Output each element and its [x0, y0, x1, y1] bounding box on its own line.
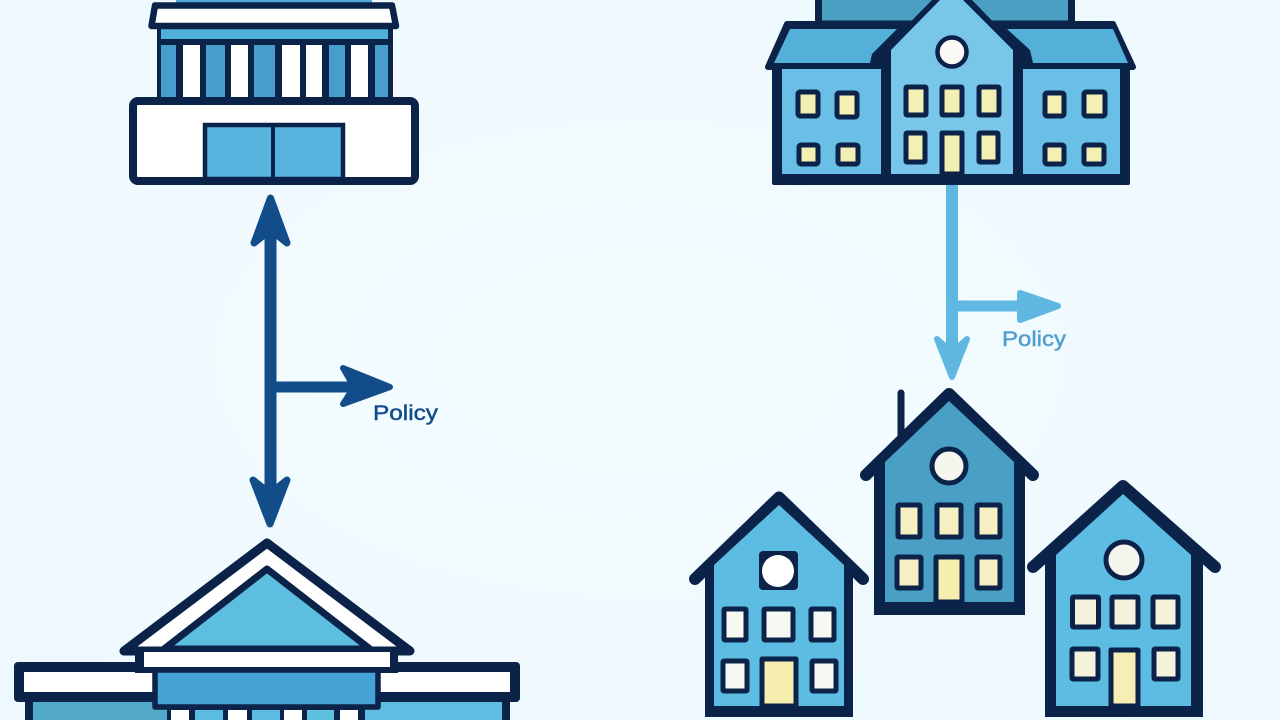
windows	[1072, 597, 1178, 706]
right wing wall	[1023, 69, 1120, 174]
icon: bottom-left institution building	[14, 543, 520, 720]
icon: left house	[695, 497, 863, 717]
icon: right house	[1033, 486, 1215, 717]
windows	[723, 609, 836, 706]
wall	[885, 401, 1014, 602]
house body	[874, 394, 1025, 615]
icon: middle house	[866, 393, 1033, 615]
roof	[1033, 486, 1215, 567]
columns	[167, 707, 365, 720]
body	[772, 66, 1130, 185]
windows	[897, 505, 1000, 602]
house body	[1045, 486, 1203, 717]
plinth	[133, 101, 415, 181]
label: Policy left: Policy	[373, 402, 439, 425]
icon: top-left government building	[133, 0, 415, 181]
icon: top-right large school building	[768, 0, 1133, 185]
rear block	[818, 0, 1072, 24]
round window	[1106, 542, 1142, 578]
frieze	[155, 670, 378, 707]
wall	[1056, 494, 1191, 706]
wall	[714, 505, 844, 706]
pediment	[124, 543, 410, 651]
chimney	[898, 393, 904, 435]
dome base strip	[176, 0, 372, 3]
entrance doors	[205, 125, 343, 179]
side roofs	[768, 24, 1133, 67]
entablature	[135, 648, 398, 673]
round window	[932, 449, 966, 483]
label: Policy right: Policy	[1002, 328, 1067, 351]
arrow: two-way policy arrow	[253, 198, 390, 524]
windows	[798, 87, 1105, 174]
roof	[695, 498, 863, 579]
left wing wall	[782, 69, 881, 174]
side wings	[14, 662, 520, 720]
arrow: one-way policy arrow	[937, 185, 1058, 377]
round window	[938, 38, 966, 66]
colonnade	[157, 25, 393, 101]
round window	[759, 551, 798, 590]
cornice	[152, 6, 396, 26]
house body	[705, 497, 853, 717]
roof	[866, 394, 1033, 475]
centre gable	[870, 0, 1033, 174]
